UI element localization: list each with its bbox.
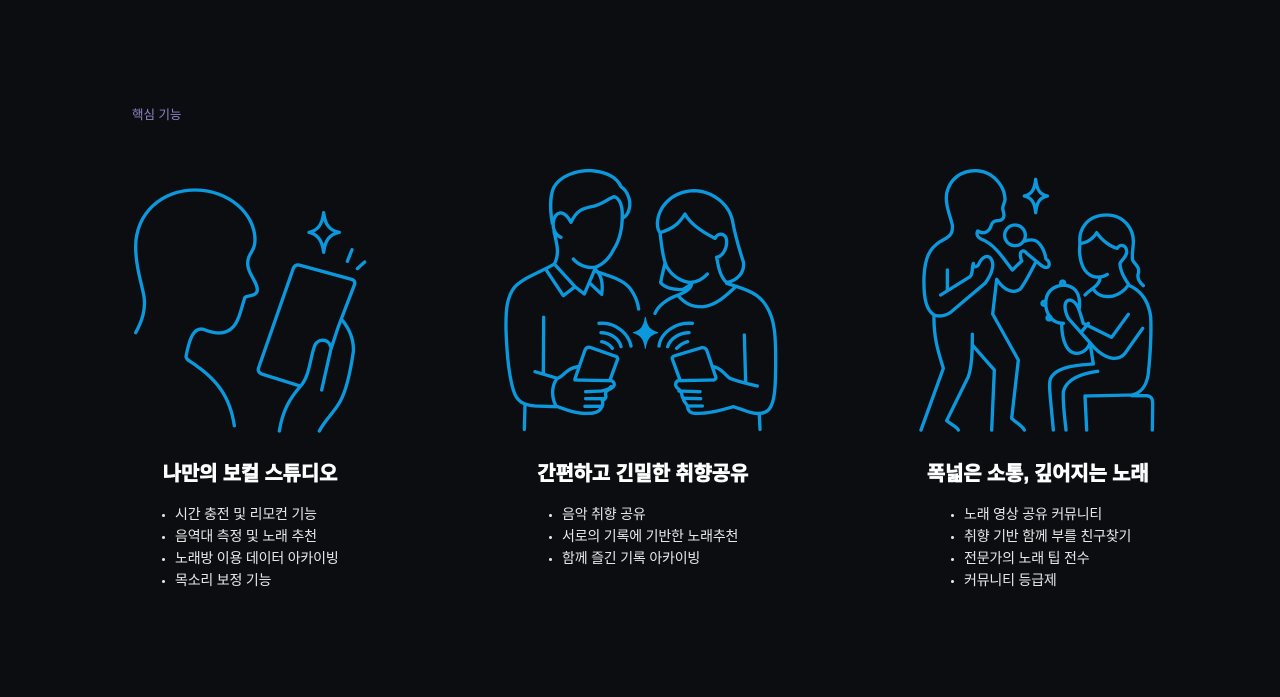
- feature list: [549, 506, 738, 566]
- feature list: 노래방 이용 데이터 아카이빙: [175, 550, 339, 566]
- feature list: 시간 충전 및 리모컨 기능: [175, 506, 317, 522]
- feature list: 서로의 기록에 기반한 노래추천: [562, 528, 738, 544]
- feature list: [951, 506, 1131, 588]
- feature list: [162, 506, 339, 588]
- heading: 폭넓은 소통, 깊어지는 노래: [927, 463, 1149, 485]
- feature list: 노래 영상 공유 커뮤니티: [964, 506, 1102, 522]
- feature list: 목소리 보정 기능: [175, 572, 271, 588]
- heading: 나만의 보컬 스튜디오: [163, 463, 338, 485]
- feature list: 전문가의 노래 팁 전수: [964, 550, 1089, 566]
- icon: two people sharing phones: [504, 168, 778, 431]
- feature list: 커뮤니티 등급제: [964, 572, 1057, 588]
- section label: 핵심 기능: [132, 108, 181, 122]
- panel: vocal studio: [134, 188, 366, 588]
- panel: community: [919, 169, 1154, 588]
- heading: 간편하고 긴밀한 취향공유: [538, 463, 748, 485]
- feature list: 음악 취향 공유: [562, 506, 646, 522]
- feature list: 음역대 측정 및 노래 추천: [175, 528, 317, 544]
- icon: singer and tambourine player: [919, 169, 1154, 432]
- panel: taste sharing: [504, 168, 778, 566]
- icon: person looking at phone: [134, 188, 366, 433]
- feature list: 취향 기반 함께 부를 친구찾기: [964, 528, 1131, 544]
- feature list: 함께 즐긴 기록 아카이빙: [562, 550, 700, 566]
